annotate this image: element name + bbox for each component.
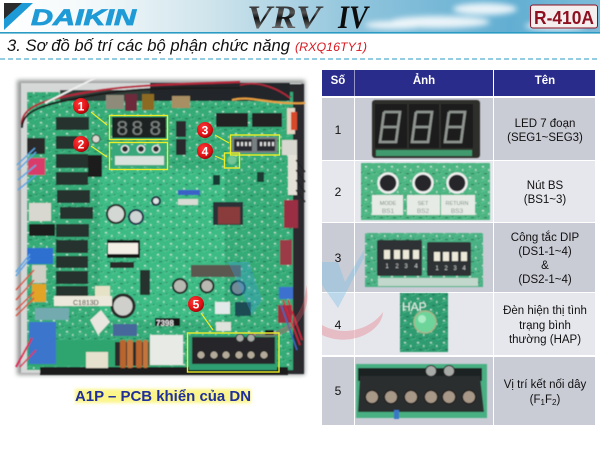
marker 1: 1 xyxy=(78,100,85,114)
row names: Vị trí kết nối dây xyxy=(504,379,586,391)
logo wordmark: DAIKIN xyxy=(31,5,138,30)
row names xyxy=(503,118,587,407)
thumbnail: DIP switches: 4 xyxy=(414,264,418,270)
marker 2 xyxy=(73,136,89,152)
thumbnail: BS buttons: BS3 xyxy=(451,208,464,215)
thumbnail: DIP switches: 3 xyxy=(404,264,408,270)
row numbers: 1 xyxy=(335,123,342,137)
VRV IV product logo xyxy=(247,0,371,36)
thumbnail: BS buttons: SET xyxy=(418,201,429,207)
yellow callout: BS buttons xyxy=(110,142,168,170)
BS buttons on board xyxy=(112,145,166,167)
row names: (DS2-1~4) xyxy=(518,274,572,286)
VRV IV product logo: IV xyxy=(337,0,371,36)
PCB photo: C1813D xyxy=(73,300,99,307)
thumbnail: HAP lamp: HAP xyxy=(402,300,427,314)
row names: 1 xyxy=(541,398,546,407)
PCB photo: 8 xyxy=(149,119,162,142)
row names: thường (HAP) xyxy=(509,334,581,346)
PCB photo xyxy=(16,78,307,375)
thumbnail: DIP switches: 1 xyxy=(435,266,439,272)
thumbnail: BS buttons: BS2 xyxy=(417,208,430,215)
top connectors xyxy=(106,95,124,109)
table header: Tên xyxy=(535,75,555,87)
leader lines xyxy=(91,112,229,330)
row names: (BS1~3) xyxy=(524,194,566,206)
board labels xyxy=(54,296,112,306)
row names: F xyxy=(545,394,552,406)
thumbnail: HAP lamp xyxy=(400,293,448,352)
thumbnail: BS buttons: BS1 xyxy=(382,208,395,215)
row numbers: 2 xyxy=(335,185,342,199)
row names: Đèn hiện thị tình xyxy=(503,305,587,317)
row backgrounds xyxy=(322,98,595,425)
table header xyxy=(322,70,595,96)
centre components xyxy=(215,202,225,224)
row names: LED 7 đoạn xyxy=(515,118,575,130)
photo frame xyxy=(17,80,305,375)
relays xyxy=(56,117,93,299)
title: 3. Sơ đồ bố trí các bộ phận chức năng xyxy=(7,37,291,55)
thumbnail: DIP switches: 2 xyxy=(444,266,448,272)
row numbers: 5 xyxy=(335,384,342,398)
PCB photo: 8 xyxy=(131,119,144,142)
VRV IV product logo: VRV xyxy=(247,0,324,36)
row names: ) xyxy=(556,394,560,406)
PCB caption: A1P – PCB khiển của DN xyxy=(75,388,251,405)
thumbnail: BS buttons xyxy=(361,163,490,220)
yellow callout: HAP xyxy=(224,153,240,168)
marker 2: 2 xyxy=(78,138,85,152)
marker 5 xyxy=(188,296,204,312)
components table xyxy=(322,70,595,425)
DIP switches on board xyxy=(232,137,277,153)
thumbnail: DIP switches: 3 xyxy=(453,266,457,272)
row numbers: 3 xyxy=(335,251,342,265)
thumbnail: DIP switches: 4 xyxy=(462,266,466,272)
left connectors xyxy=(27,138,45,154)
thumbnail: LED display xyxy=(372,100,480,158)
yellow callout: LED xyxy=(110,116,168,140)
R-410A badge: R-410A xyxy=(534,7,594,28)
thumbnail: BS buttons: MODE xyxy=(380,201,397,207)
marker 4: 4 xyxy=(202,144,209,158)
row names: (SEG1~SEG3) xyxy=(507,132,583,144)
row names: & xyxy=(541,260,549,272)
top wires xyxy=(22,82,240,125)
row numbers xyxy=(335,123,342,398)
thumbnail: DIP switches: 1 xyxy=(385,264,389,270)
row names: (DS1-1~4) xyxy=(518,246,572,258)
marker 4 xyxy=(197,143,213,159)
marker 3 xyxy=(197,122,213,138)
marker 1 xyxy=(73,98,89,114)
electrolytic capacitors xyxy=(107,205,125,223)
thumbnail: terminal block xyxy=(356,364,487,419)
marker 5: 5 xyxy=(193,298,200,312)
row names: (F xyxy=(530,394,541,406)
watermark on PCB xyxy=(228,262,307,337)
row names: trạng bình xyxy=(519,320,571,332)
title: (RXQ16TY1) xyxy=(295,42,367,54)
thumbnail: DIP switches xyxy=(365,233,483,287)
row numbers: 4 xyxy=(335,318,342,332)
Daikin logo xyxy=(4,3,138,30)
row names: Công tắc DIP xyxy=(511,231,580,244)
terminal block on board xyxy=(189,335,277,370)
seven-segment on board xyxy=(112,117,166,138)
thumbnail: DIP switches: 2 xyxy=(395,264,399,270)
table header: Số xyxy=(331,75,345,87)
table header: Ảnh xyxy=(413,74,435,87)
yellow callout: terminal xyxy=(188,333,279,372)
PCB photo: 8 xyxy=(116,119,129,142)
thumbnail: BS buttons: RETURN xyxy=(446,201,468,207)
choke coil xyxy=(115,340,149,368)
header banner xyxy=(0,0,600,34)
row names: 2 xyxy=(552,398,557,407)
marker 3: 3 xyxy=(202,124,209,138)
PCB photo: 7398 xyxy=(156,319,174,328)
HAP lamp on board xyxy=(228,156,236,164)
row names: Nút BS xyxy=(527,180,564,192)
logo mark xyxy=(4,3,33,30)
yellow callout: DIP xyxy=(230,135,280,155)
table watermark xyxy=(322,250,383,340)
